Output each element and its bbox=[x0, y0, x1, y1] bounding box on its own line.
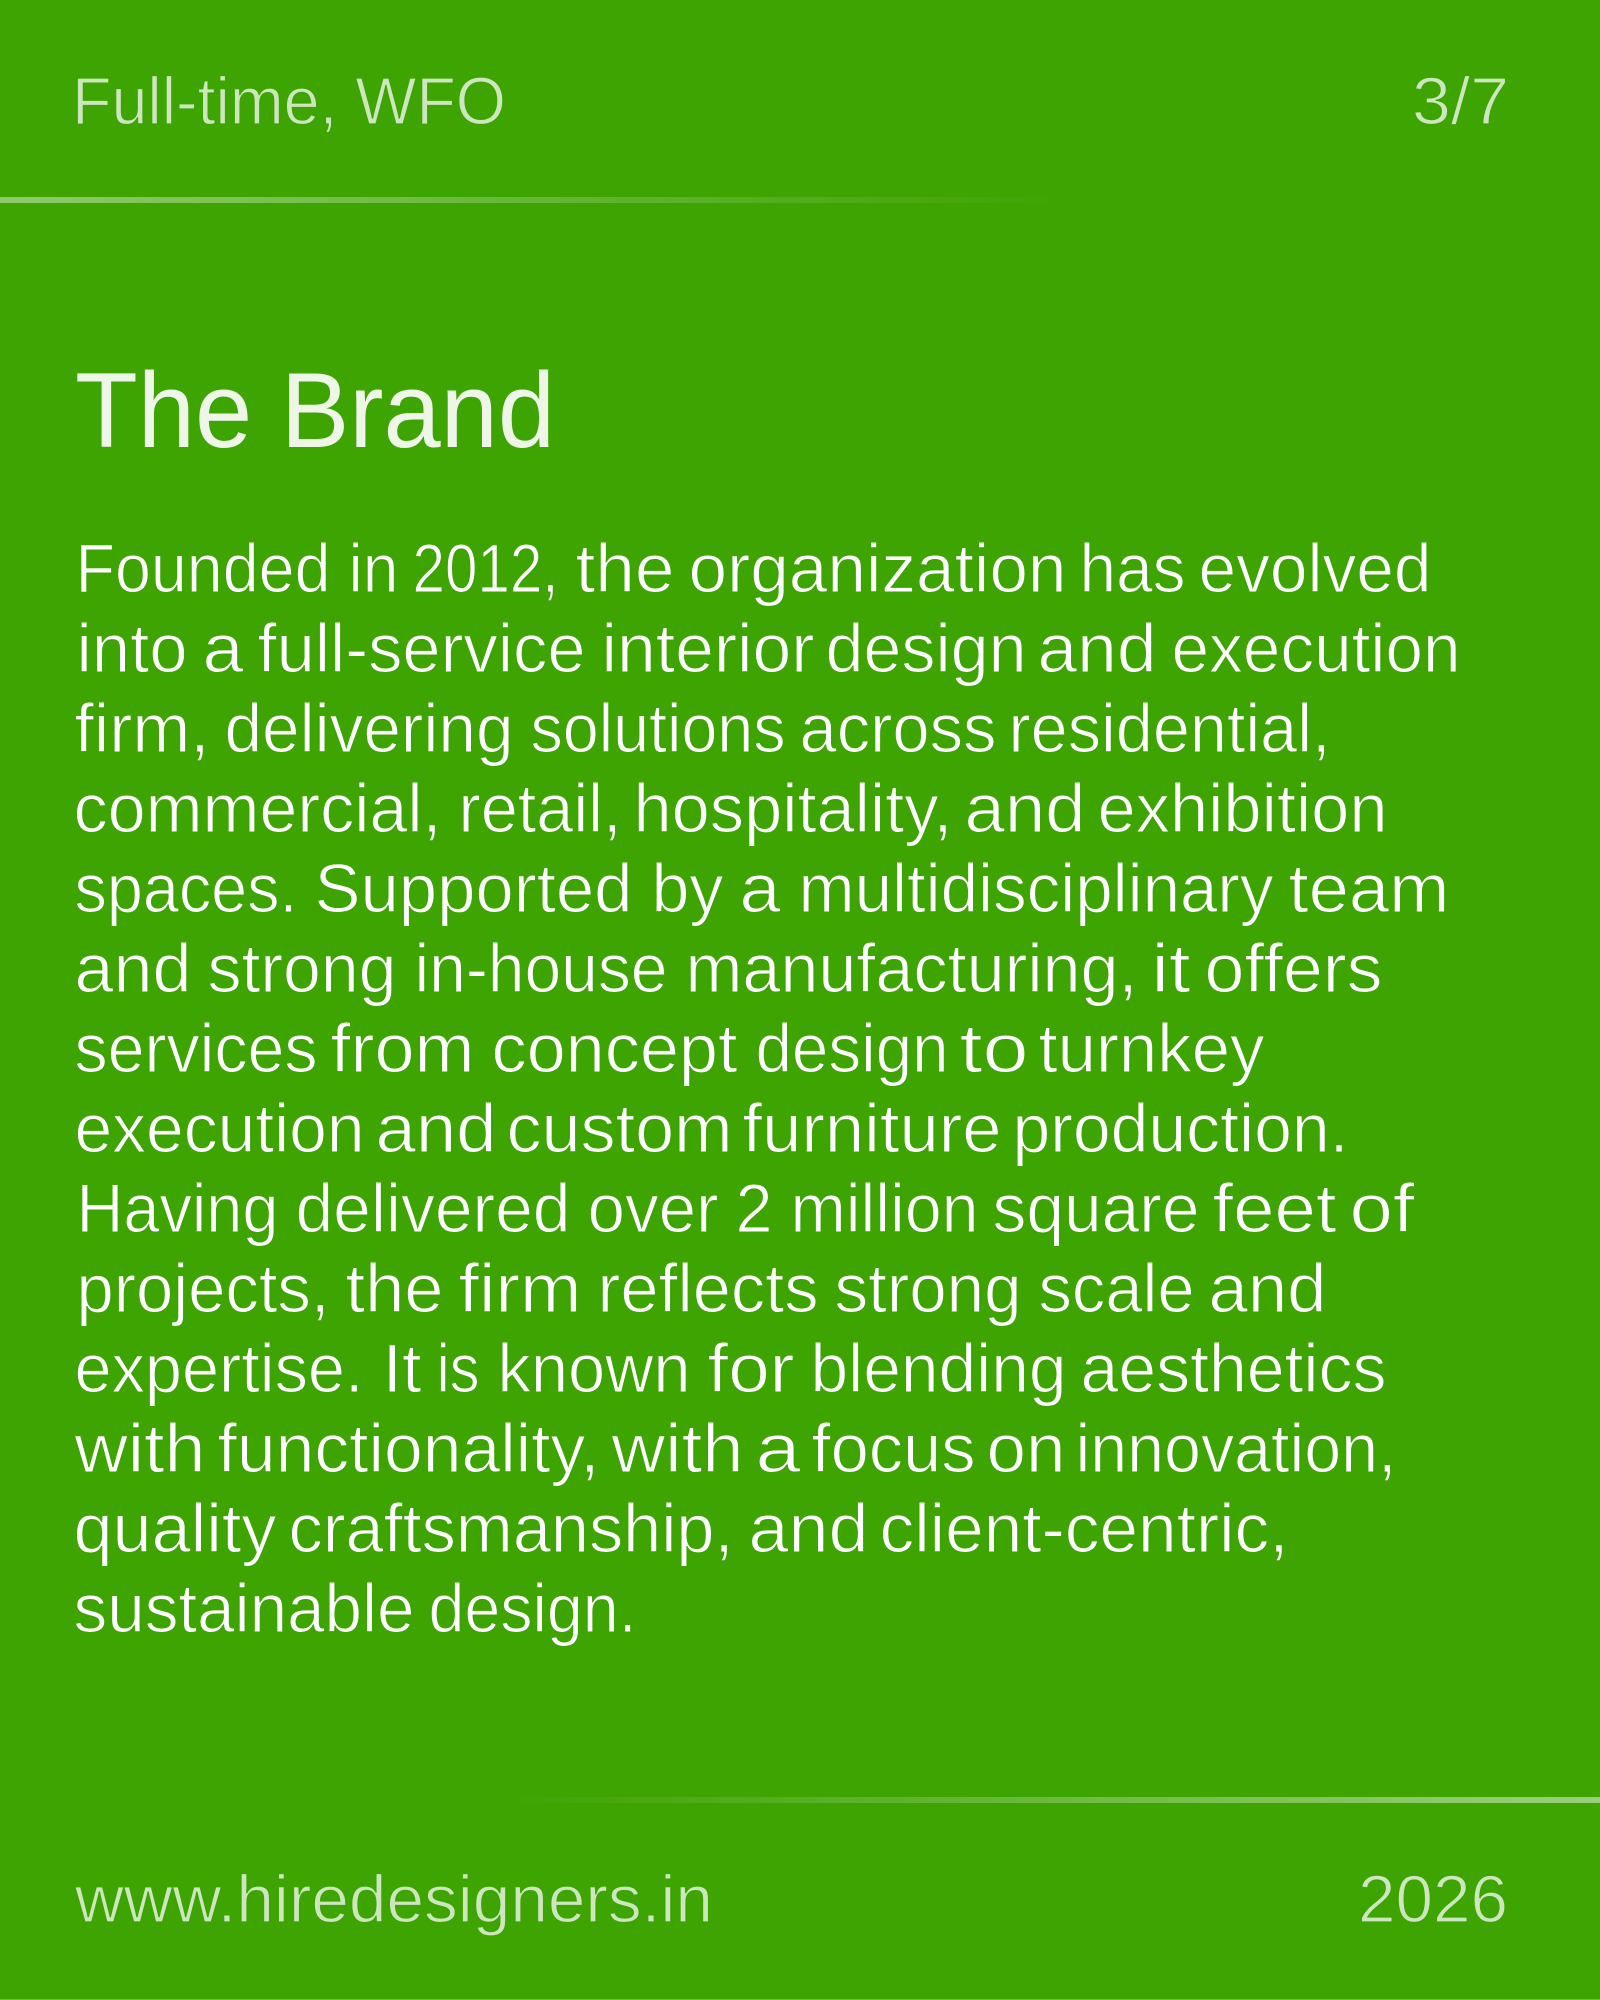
body paragraph: 2 bbox=[736, 1170, 772, 1247]
body paragraph: a bbox=[202, 610, 244, 687]
heading: The Brand: The Brand bbox=[75, 350, 555, 470]
body paragraph: evolved bbox=[1198, 530, 1432, 607]
body paragraph: craftsmanship, bbox=[288, 1490, 734, 1567]
body paragraph: over bbox=[588, 1170, 718, 1247]
body paragraph: design bbox=[756, 1010, 948, 1087]
body paragraph: full-service bbox=[258, 610, 586, 687]
body paragraph: firm bbox=[458, 1250, 582, 1327]
body paragraph: execution bbox=[1172, 610, 1460, 687]
body paragraph: execution bbox=[74, 1090, 364, 1167]
body paragraph: residential, bbox=[1008, 690, 1330, 767]
body paragraph: Supported bbox=[314, 850, 632, 927]
body paragraph: strong bbox=[208, 930, 396, 1007]
body paragraph: and bbox=[964, 770, 1086, 847]
body paragraph: it bbox=[1152, 930, 1190, 1007]
body paragraph: a bbox=[740, 850, 781, 927]
body paragraph: square bbox=[992, 1170, 1200, 1247]
body paragraph: focus bbox=[812, 1410, 976, 1487]
body paragraph: client-centric, bbox=[880, 1490, 1288, 1567]
body paragraph: team bbox=[1288, 850, 1450, 927]
body paragraph: the bbox=[346, 1250, 444, 1327]
body paragraph: across bbox=[800, 690, 996, 767]
body paragraph: production. bbox=[1012, 1090, 1348, 1167]
body paragraph: firm, bbox=[74, 690, 210, 767]
body paragraph: retail, bbox=[458, 770, 622, 847]
body paragraph: expertise. bbox=[74, 1330, 364, 1407]
body paragraph: sustainable bbox=[74, 1570, 414, 1647]
body paragraph: Having bbox=[76, 1170, 278, 1247]
body paragraph: and bbox=[748, 1490, 868, 1567]
body paragraph: and bbox=[1038, 610, 1156, 687]
body paragraph: by bbox=[652, 850, 724, 927]
body paragraph: solutions bbox=[530, 690, 786, 767]
footer: website: www.hiredesigners.in bbox=[74, 1862, 713, 1937]
body paragraph: the bbox=[576, 530, 674, 607]
body paragraph: a bbox=[756, 1410, 801, 1487]
body paragraph: aesthetics bbox=[1080, 1330, 1386, 1407]
body paragraph: into bbox=[76, 610, 188, 687]
body paragraph: turnkey bbox=[1038, 1010, 1265, 1087]
body paragraph: million bbox=[790, 1170, 978, 1247]
header: page number: 3/7 bbox=[1412, 64, 1509, 139]
body paragraph: to bbox=[960, 1010, 1028, 1087]
body paragraph: feet bbox=[1212, 1170, 1336, 1247]
body paragraph: manufacturing, bbox=[686, 930, 1138, 1007]
body paragraph: strong bbox=[834, 1250, 1022, 1327]
body paragraph: It bbox=[382, 1330, 422, 1407]
body paragraph: has bbox=[1080, 530, 1186, 607]
body paragraph: and bbox=[376, 1090, 496, 1167]
body paragraph: and bbox=[1208, 1250, 1326, 1327]
body paragraph: on bbox=[986, 1410, 1066, 1487]
body paragraph: scale bbox=[1038, 1250, 1194, 1327]
body paragraph: concept bbox=[492, 1010, 738, 1087]
body paragraph: functionality, bbox=[218, 1410, 600, 1487]
body paragraph: design. bbox=[428, 1570, 636, 1647]
body paragraph: for bbox=[708, 1330, 794, 1407]
body paragraph: delivered bbox=[296, 1170, 570, 1247]
body paragraph: is bbox=[436, 1330, 480, 1407]
body paragraph: offers bbox=[1204, 930, 1382, 1007]
body paragraph: and bbox=[74, 930, 192, 1007]
body paragraph: from bbox=[330, 1010, 474, 1087]
footer: year: 2026 bbox=[1358, 1862, 1508, 1937]
body paragraph: reflects bbox=[598, 1250, 818, 1327]
body paragraph: commercial, bbox=[74, 770, 442, 847]
body paragraph: in-house bbox=[414, 930, 668, 1007]
body paragraph: furniture bbox=[742, 1090, 1002, 1167]
body paragraph: exhibition bbox=[1098, 770, 1388, 847]
body paragraph: blending bbox=[810, 1330, 1066, 1407]
body paragraph: organization bbox=[688, 530, 1066, 607]
body paragraph: quality bbox=[74, 1490, 277, 1567]
header: employment type: Full-time, WFO bbox=[72, 64, 506, 139]
body paragraph: 2012, bbox=[412, 530, 558, 607]
body paragraph: in bbox=[348, 530, 398, 607]
body paragraph: interior bbox=[602, 610, 814, 687]
body paragraph: innovation, bbox=[1076, 1410, 1396, 1487]
body paragraph: delivering bbox=[224, 690, 514, 767]
body paragraph: services bbox=[74, 1010, 318, 1087]
body paragraph: projects, bbox=[76, 1250, 330, 1327]
body paragraph: known bbox=[498, 1330, 690, 1407]
body paragraph: multidisciplinary bbox=[798, 850, 1274, 927]
body paragraph: of bbox=[1350, 1170, 1415, 1247]
body paragraph bbox=[73, 530, 1461, 1647]
body paragraph: with bbox=[73, 1410, 205, 1487]
body paragraph: hospitality, bbox=[634, 770, 952, 847]
body paragraph: with bbox=[610, 1410, 744, 1487]
body paragraph: design bbox=[826, 610, 1026, 687]
body paragraph: custom bbox=[506, 1090, 732, 1167]
body paragraph: Founded bbox=[76, 530, 330, 607]
body paragraph: spaces. bbox=[74, 850, 298, 927]
